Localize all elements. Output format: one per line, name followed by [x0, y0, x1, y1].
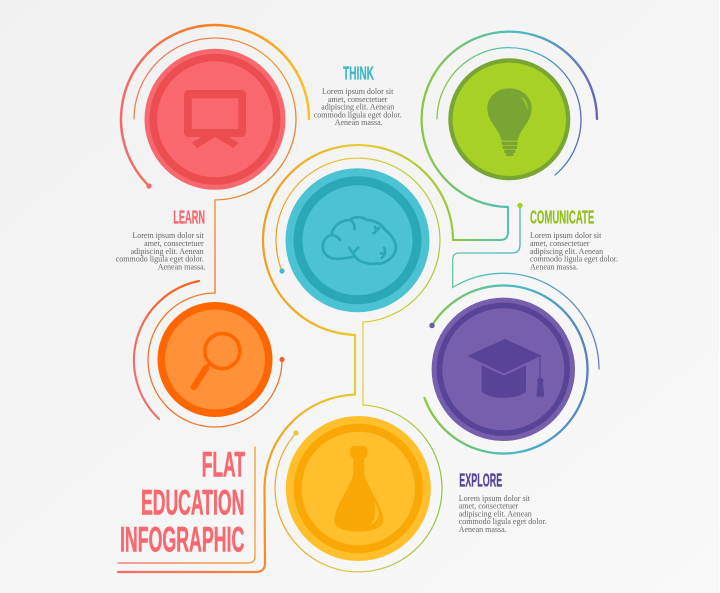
panel: think circle with board icon [144, 49, 286, 190]
title: EDUCATION [141, 484, 244, 522]
line: footer rule through yellow outer arc [118, 335, 355, 572]
line: red inner arc into orange inner arc [134, 38, 296, 427]
heading: think: THINK [343, 62, 374, 83]
text block: explore: commodo ligula eget dolor. [459, 517, 547, 526]
heading: comunicate: COMUNICATE [530, 206, 594, 227]
text block: learn: amet, consectetuer [144, 239, 204, 248]
title: INFOGRAPHIC [120, 521, 244, 560]
text block: think: amet, consectetuer [328, 95, 388, 104]
text block: explore: amet, consectetuer [459, 502, 519, 510]
line: purple thin arc into communicate connector [453, 206, 599, 369]
text block: learn: adipiscing elit. Aenean [131, 247, 204, 256]
text: EXPLORE [459, 470, 502, 491]
text block: comunicate: commodo ligula eget dolor. [530, 254, 618, 264]
text block: comunicate: Aenean massa. [530, 262, 578, 272]
text: FLAT [202, 446, 245, 485]
arc: green inner [437, 48, 581, 175]
arc: green outer [422, 32, 597, 207]
panel: flask circle [286, 416, 431, 561]
panel: learn circle with magnifier icon [158, 302, 272, 417]
icon: light bulb [487, 88, 532, 156]
arc: teal inner [276, 158, 440, 405]
panel: communicate circle with bulb icon [448, 58, 570, 180]
text block: think: commodo ligula eget dolor. [314, 110, 402, 120]
line: title bracket [118, 447, 255, 563]
text block: comunicate: Lorem ipsum dolor sit [530, 231, 602, 240]
arc: red outer [121, 25, 309, 186]
text block: explore: adipiscing elit. Aenean [459, 510, 532, 518]
icon: presentation board [184, 90, 246, 148]
connecting lines and arcs [118, 25, 599, 572]
line: teal to green link [453, 207, 508, 240]
icon: flask [334, 446, 383, 532]
arc: purple outer [424, 286, 588, 454]
arc: teal outer [263, 145, 453, 335]
text block: learn: commodo ligula eget dolor. [116, 254, 204, 264]
text block: think: Aenean massa. [335, 118, 383, 127]
text block: think: adipiscing elit. Aenean [321, 102, 394, 112]
text block: comunicate: amet, consectetuer [530, 239, 590, 248]
text block: comunicate: adipiscing elit. Aenean [530, 247, 603, 256]
arc: orange outer [134, 281, 199, 419]
icon: graduation cap [467, 339, 544, 398]
text block: explore: Lorem ipsum dolor sit [459, 494, 531, 503]
panel: explore circle with graduation cap icon [432, 298, 575, 441]
text block: learn: Aenean massa. [158, 262, 206, 272]
panel: brain circle [286, 168, 430, 312]
text block: think: Lorem ipsum dolor sit [322, 87, 394, 96]
arc: yellow inner [275, 405, 442, 572]
icon: magnifier [194, 334, 240, 387]
text: LEARN [173, 206, 205, 227]
title [120, 446, 245, 560]
icon: brain [323, 217, 396, 264]
text block: explore: Aenean massa. [459, 525, 507, 534]
connector end dots [146, 183, 523, 436]
text block: learn: Lorem ipsum dolor sit [132, 231, 204, 240]
